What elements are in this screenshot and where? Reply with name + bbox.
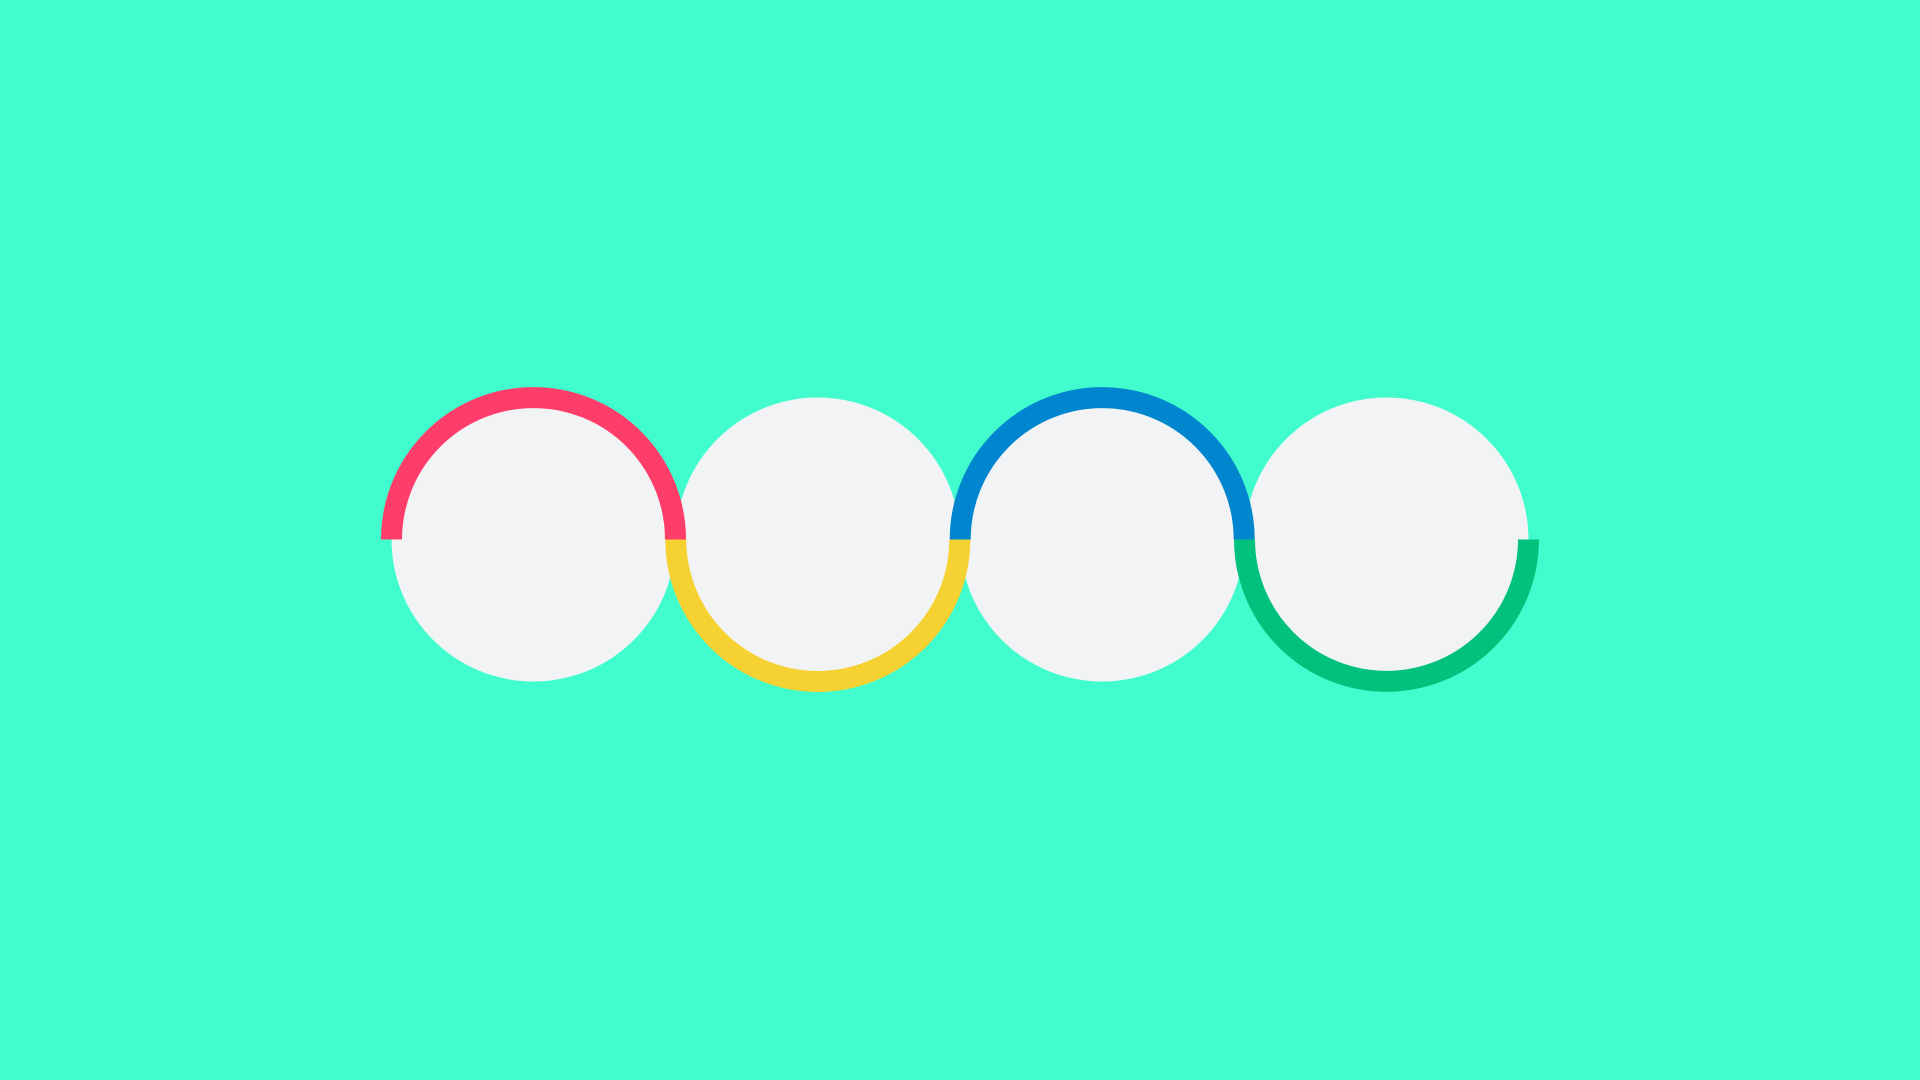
arc: blue upper half on circle 3 — [960, 398, 1244, 540]
arc: red upper half on circle 1 — [392, 398, 676, 540]
circle 1 — [392, 398, 676, 682]
circle 4 — [1244, 398, 1528, 682]
circle 3 — [960, 398, 1244, 682]
circle 2 — [676, 398, 960, 682]
arc: yellow lower half on circle 2 — [676, 540, 960, 681]
arc: green lower half on circle 4 — [1244, 540, 1528, 681]
